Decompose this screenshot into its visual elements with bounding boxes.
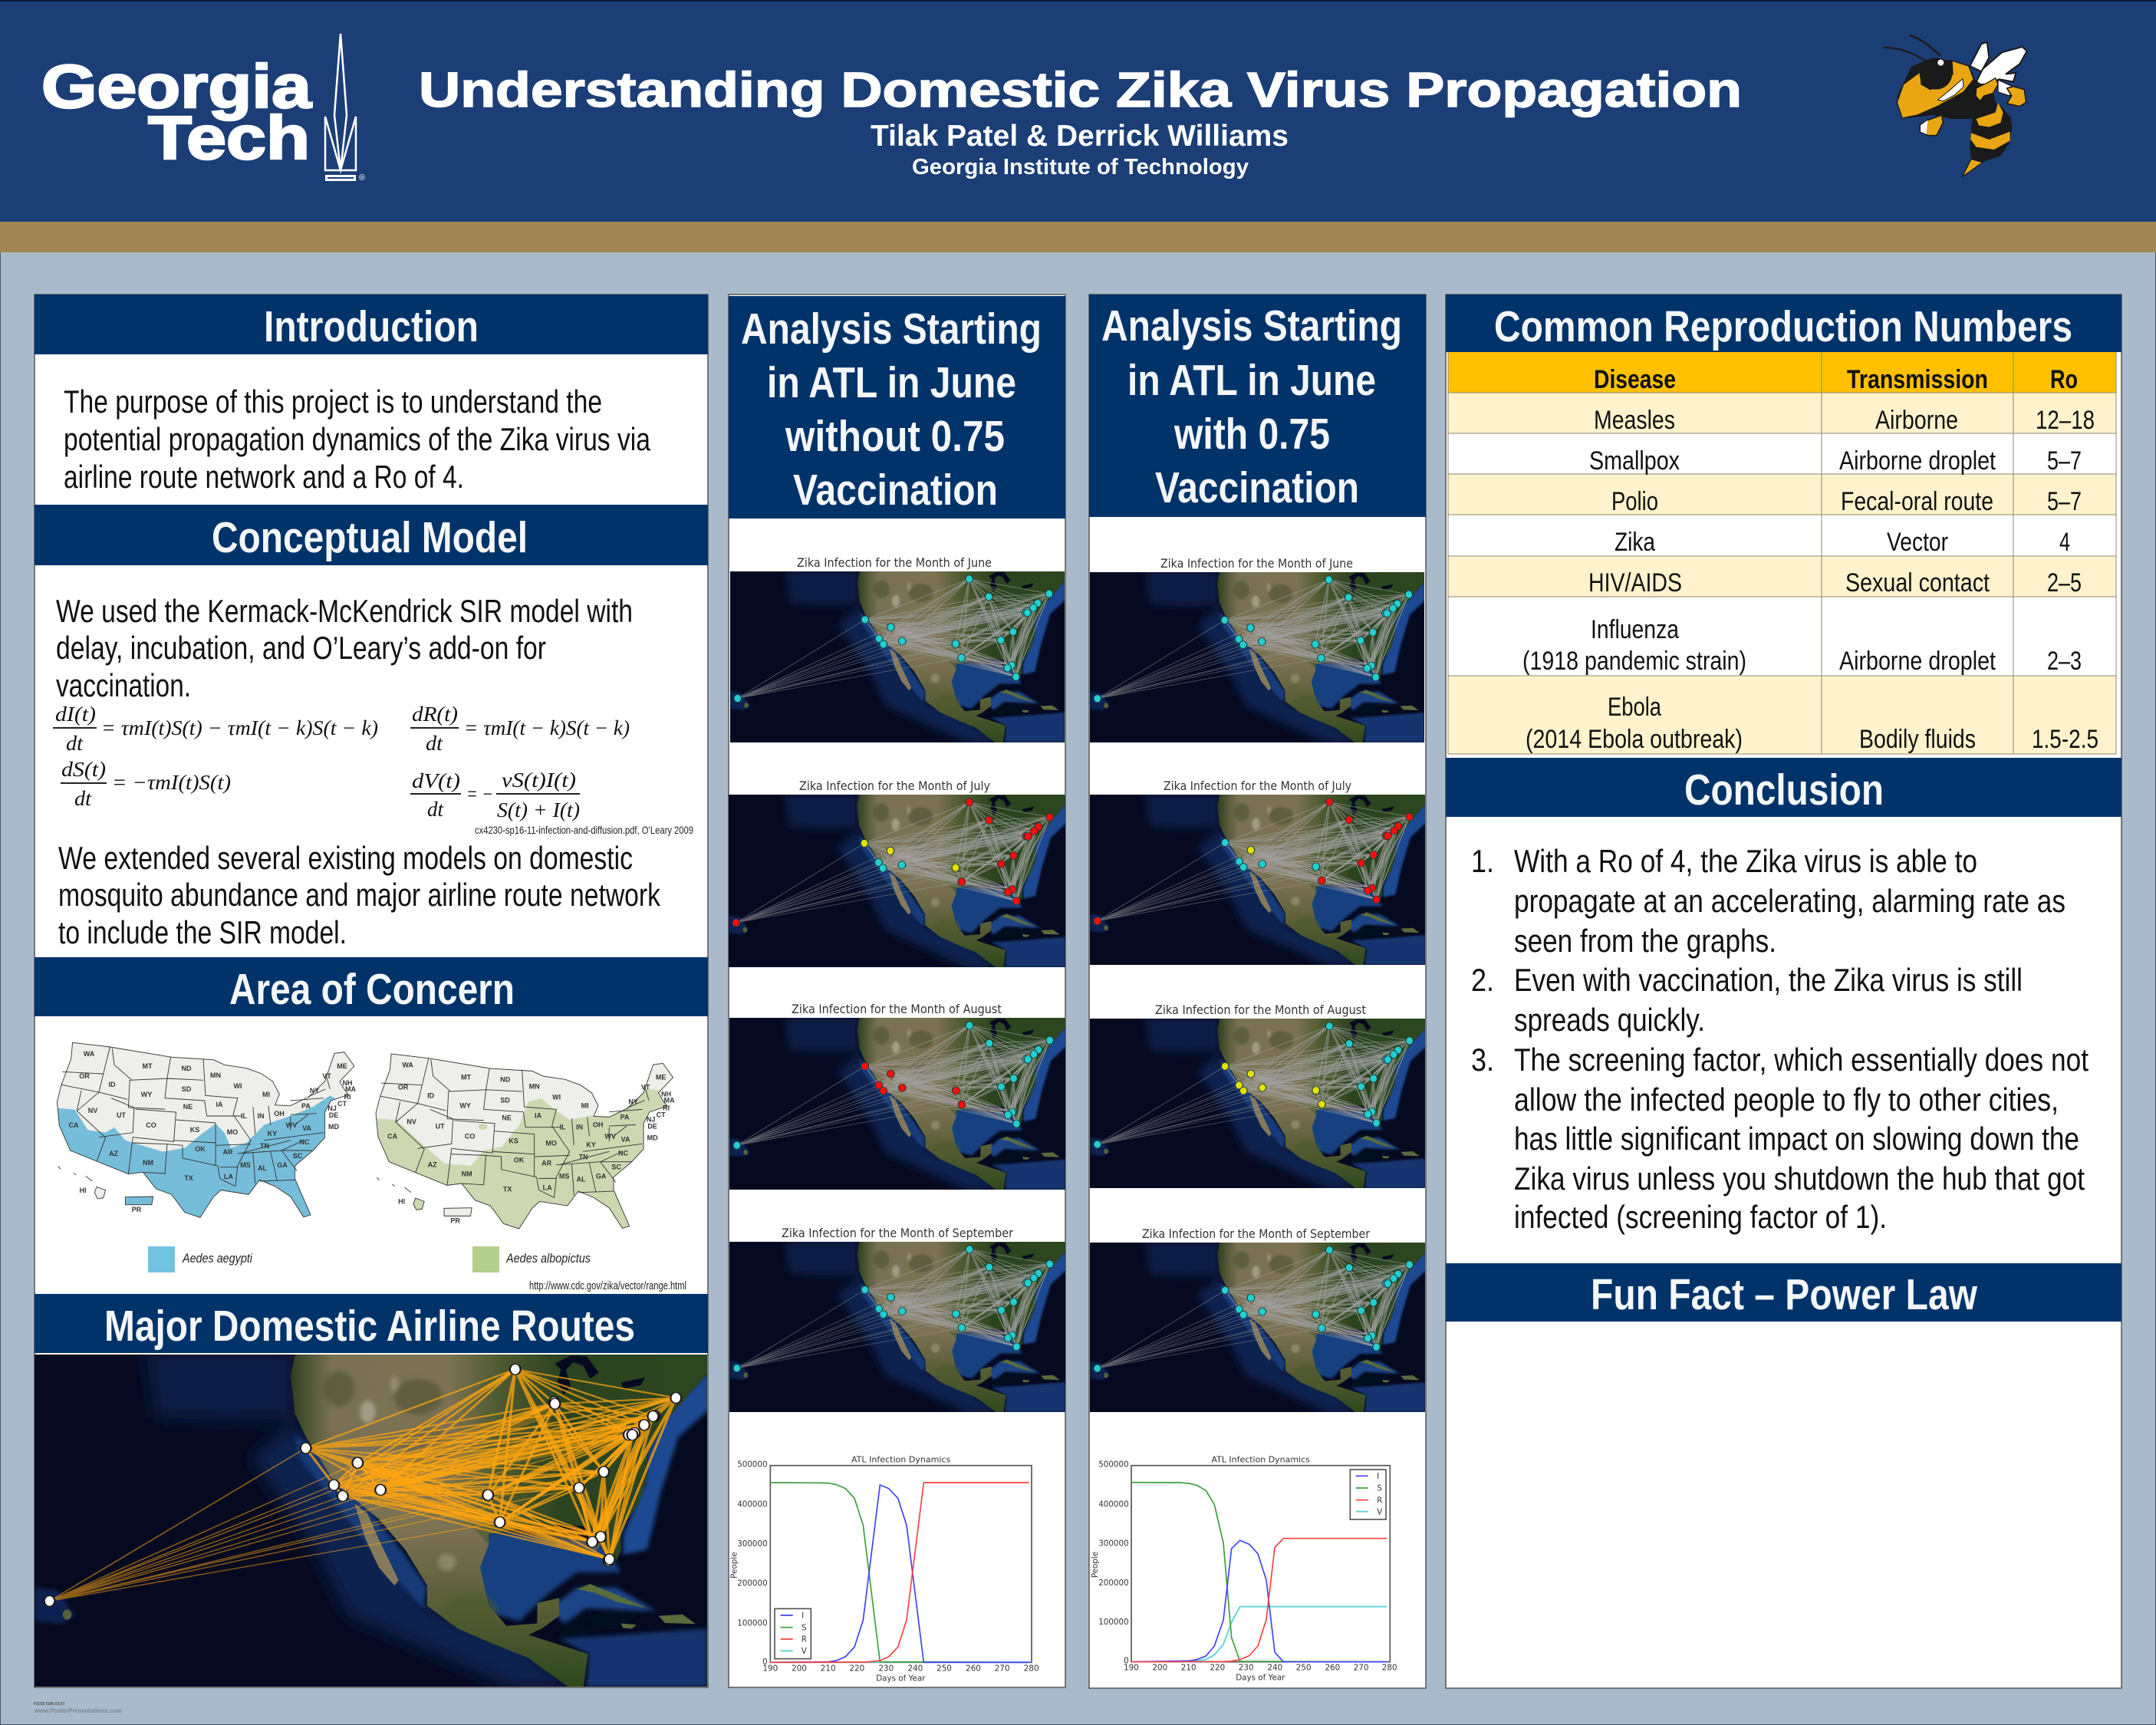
map: with vaccination, August bbox=[1090, 1002, 1426, 1190]
text block: introduction bbox=[64, 384, 651, 495]
chart: ATL dynamics without vaccination: 100000 bbox=[737, 1618, 768, 1628]
map: Aedes albopictus range: ND bbox=[500, 1076, 511, 1084]
map: Aedes aegypti range: NJ bbox=[328, 1104, 337, 1112]
map: Aedes aegypti range: AZ bbox=[109, 1150, 118, 1157]
chart: ATL dynamics with vaccination: 230 bbox=[1239, 1663, 1254, 1672]
table: reproduction numbers: 12–18 bbox=[2036, 406, 2095, 435]
map: Aedes albopictus range: HI bbox=[398, 1198, 405, 1206]
map: Aedes aegypti range: ME bbox=[337, 1062, 347, 1070]
map: Aedes aegypti range: WA bbox=[84, 1050, 95, 1058]
footer credit: POSTER TEMPLATE BY: bbox=[34, 1702, 65, 1707]
text block: model extension bbox=[58, 840, 661, 950]
map: no vaccination, September: Zika Infection for the Month of September bbox=[782, 1226, 1013, 1240]
panel: analysis with vaccination bbox=[1089, 295, 1426, 1688]
authors: Tilak Patel & Derrick Williams bbox=[871, 120, 1289, 153]
text block: model description bbox=[56, 593, 633, 703]
chart: ATL dynamics with vaccination: 200 bbox=[1152, 1663, 1167, 1672]
map: Aedes aegypti range: AR bbox=[222, 1148, 233, 1156]
map: Aedes aegypti range: NY bbox=[310, 1087, 319, 1095]
map: no vaccination, July: Zika Infection for the Month of July bbox=[799, 779, 990, 793]
map: Aedes albopictus range: NJ bbox=[647, 1116, 655, 1124]
footer credit bbox=[34, 1702, 122, 1714]
text block: conclusion list: seen from the graphs. bbox=[1514, 923, 1776, 959]
map: no vaccination, June: Zika Infection for the Month of June bbox=[797, 555, 992, 570]
map: Aedes albopictus range: VA bbox=[621, 1136, 630, 1144]
heading: analysis without vaccination: without 0.75 bbox=[785, 412, 1005, 461]
equations: dI(t) bbox=[55, 703, 96, 726]
map: Aedes albopictus range: DE bbox=[647, 1123, 657, 1131]
table: reproduction numbers: Bodily fluids bbox=[1859, 725, 1976, 754]
map: with vaccination, June: Zika Infection for the Month of June bbox=[1160, 556, 1353, 571]
map: with vaccination, July: Zika Infection for the Month of July bbox=[1164, 779, 1351, 793]
chart: ATL dynamics with vaccination: 250 bbox=[1296, 1663, 1312, 1672]
map: Aedes albopictus range: NH bbox=[661, 1091, 671, 1098]
chart: ATL dynamics with vaccination: 220 bbox=[1210, 1663, 1225, 1672]
chart: ATL dynamics with vaccination: People bbox=[1091, 1552, 1100, 1578]
map: Aedes aegypti range: MD bbox=[328, 1123, 339, 1131]
map: Aedes aegypti range: MO bbox=[227, 1128, 238, 1136]
table: reproduction numbers: Measles bbox=[1594, 406, 1675, 435]
text block: introduction: potential propagation dynamics of the Zika virus via bbox=[64, 421, 651, 457]
map: Aedes albopictus range: IL bbox=[560, 1124, 566, 1131]
map: Aedes albopictus range: KS bbox=[509, 1137, 518, 1145]
map: Aedes albopictus range: NV bbox=[407, 1118, 416, 1126]
text block: conclusion list: Even with vaccination, the Zika virus is still bbox=[1514, 962, 2023, 998]
map: Aedes aegypti range: CO bbox=[146, 1121, 156, 1129]
map: Aedes albopictus range: MA bbox=[664, 1097, 675, 1104]
map: Aedes albopictus range: OR bbox=[398, 1084, 409, 1091]
heading: Conceptual Model: Conceptual Model bbox=[212, 513, 528, 562]
header band bbox=[0, 0, 2156, 252]
equations: = −τmI(t)S(t) bbox=[112, 771, 231, 794]
logo: Georgia Tech: Georgia bbox=[41, 52, 312, 120]
map: Aedes albopictus range: MT bbox=[461, 1074, 472, 1081]
map: Aedes aegypti range: VT bbox=[322, 1072, 331, 1080]
table: reproduction numbers: Airborne droplet bbox=[1839, 446, 1996, 476]
map: airline routes bbox=[35, 1351, 709, 1690]
chart: ATL dynamics without vaccination: 400000 bbox=[737, 1500, 768, 1509]
equations: S(t) + I(t) bbox=[497, 798, 580, 821]
equations: vS(t)I(t) bbox=[502, 769, 576, 792]
map: no vaccination, August bbox=[729, 1002, 1066, 1191]
table: reproduction numbers: 2–3 bbox=[2047, 647, 2082, 676]
table: reproduction numbers: 4 bbox=[2059, 528, 2070, 557]
map: Aedes albopictus range: AZ bbox=[428, 1161, 437, 1169]
map: Aedes albopictus range: VT bbox=[641, 1084, 650, 1091]
chart: ATL dynamics with vaccination: 210 bbox=[1181, 1663, 1196, 1672]
heading: Area of Concern bbox=[35, 957, 708, 1016]
equations bbox=[53, 703, 630, 821]
chart: ATL dynamics with vaccination: Days of Year bbox=[1236, 1673, 1285, 1682]
map: Aedes aegypti range: NC bbox=[299, 1138, 310, 1146]
map: Aedes albopictus range: AL bbox=[577, 1176, 586, 1183]
heading: analysis with vaccination: with 0.75 bbox=[1173, 410, 1330, 459]
map: Aedes aegypti range: AL bbox=[258, 1164, 267, 1172]
map: with vaccination, September: Zika Infection for the Month of September bbox=[1142, 1226, 1370, 1241]
text block: conclusion list: allow the infected people to fly to other cities, bbox=[1514, 1081, 2059, 1118]
title: Understanding Domestic Zika Virus Propagation bbox=[419, 62, 1742, 117]
table: reproduction numbers: Airborne droplet bbox=[1839, 647, 1996, 676]
heading: Fun Fact: Fun Fact – Power Law bbox=[1591, 1270, 1978, 1319]
map: Aedes aegypti range: MS bbox=[240, 1161, 251, 1169]
map: Aedes aegypti range: TN bbox=[260, 1142, 269, 1150]
text block: introduction: The purpose of this project is to understand the bbox=[64, 384, 602, 420]
map: no vaccination, July bbox=[729, 779, 1066, 969]
table: reproduction numbers: Ebola bbox=[1608, 693, 1661, 722]
table: reproduction numbers: Fecal-oral route bbox=[1841, 487, 1993, 516]
map: Aedes albopictus range: ID bbox=[427, 1092, 435, 1100]
heading: analysis without vaccination: Vaccination bbox=[793, 466, 998, 515]
text block: model extension: mosquito abundance and major airline route network bbox=[58, 877, 661, 913]
chart: ATL dynamics without vaccination: 240 bbox=[907, 1664, 923, 1673]
chart: ATL dynamics without vaccination: 0 bbox=[762, 1658, 768, 1667]
text block: conclusion list: propagate at an accelerating, alarming rate as bbox=[1514, 883, 2065, 919]
map: Aedes albopictus range: MI bbox=[581, 1102, 589, 1110]
icon: yellow jacket mascot bbox=[1884, 35, 2027, 177]
table: reproduction numbers: HIV/AIDS bbox=[1588, 568, 1682, 597]
map: Aedes aegypti range: UT bbox=[117, 1111, 126, 1119]
heading: analysis with vaccination: Analysis Starting bbox=[1101, 301, 1402, 351]
chart: ATL dynamics without vaccination: 200000 bbox=[737, 1579, 768, 1588]
map: Aedes albopictus range: TX bbox=[503, 1186, 512, 1193]
map: Aedes aegypti range: SD bbox=[182, 1085, 192, 1093]
map: Aedes aegypti range: OK bbox=[195, 1145, 206, 1153]
equations: dR(t) bbox=[412, 703, 458, 726]
footer credit: www.PosterPresentations.com bbox=[34, 1707, 122, 1714]
map: Aedes albopictus range: GA bbox=[596, 1173, 607, 1180]
map: Aedes albopictus range: WY bbox=[459, 1102, 471, 1110]
map: Aedes albopictus range: NM bbox=[462, 1170, 472, 1178]
map: Aedes albopictus range: WI bbox=[552, 1094, 561, 1101]
map: Aedes albopictus range: WV bbox=[604, 1133, 616, 1141]
table: reproduction numbers: (2014 Ebola outbreak) bbox=[1526, 725, 1743, 754]
chart: ATL dynamics with vaccination: 0 bbox=[1124, 1657, 1129, 1666]
text block: conclusion list: 3. bbox=[1471, 1042, 1494, 1078]
table: reproduction numbers: Transmission bbox=[1847, 365, 1988, 394]
chart: ATL dynamics with vaccination: 500000 bbox=[1098, 1460, 1129, 1470]
equations: = − bbox=[466, 782, 493, 805]
heading: Conclusion: Conclusion bbox=[1684, 765, 1884, 815]
map: Aedes aegypti range: NV bbox=[88, 1107, 97, 1114]
map: Aedes aegypti range: IL bbox=[241, 1112, 248, 1120]
heading: analysis without vaccination: Analysis Starting bbox=[741, 305, 1042, 354]
chart: ATL dynamics without vaccination: 190 bbox=[762, 1664, 778, 1673]
map: Aedes aegypti range: KY bbox=[268, 1130, 277, 1137]
citation: equations source: cx4230-sp16-11-infection-and-diffusion.pdf, O’Leary 2009 bbox=[475, 824, 693, 836]
chart: ATL dynamics with vaccination: 200000 bbox=[1098, 1579, 1129, 1588]
map: Aedes aegypti range: GA bbox=[277, 1161, 288, 1169]
equations: = τmI(t − k)S(t − k) bbox=[464, 716, 630, 739]
chart: ATL dynamics with vaccination: 100000 bbox=[1098, 1618, 1129, 1627]
text block: conclusion list: infected (screening factor of 1). bbox=[1514, 1199, 1887, 1235]
map: Aedes aegypti range: KS bbox=[190, 1126, 199, 1134]
equations: dt bbox=[74, 787, 93, 810]
map: Aedes albopictus range: IA bbox=[535, 1112, 542, 1120]
heading: Introduction: Introduction bbox=[264, 302, 479, 351]
table: reproduction numbers: Vector bbox=[1887, 528, 1948, 557]
map: Aedes aegypti range: OH bbox=[274, 1110, 285, 1118]
map: Aedes albopictus range: MD bbox=[647, 1134, 658, 1142]
map: Aedes aegypti range: VA bbox=[302, 1124, 311, 1132]
table: reproduction numbers: 2–5 bbox=[2047, 568, 2082, 597]
map: Aedes albopictus range: CA bbox=[387, 1133, 398, 1141]
map: no vaccination, June bbox=[730, 555, 1065, 744]
map: with vaccination, September bbox=[1090, 1226, 1426, 1414]
chart: ATL dynamics with vaccination: S bbox=[1377, 1484, 1382, 1493]
heading: Fun Fact bbox=[1446, 1263, 2121, 1322]
equations: dt bbox=[426, 732, 444, 755]
table: reproduction numbers: Airborne bbox=[1875, 406, 1958, 435]
map: Aedes albopictus range: MN bbox=[529, 1083, 540, 1091]
chart: ATL dynamics without vaccination: V bbox=[802, 1647, 807, 1656]
chart: ATL dynamics without vaccination: 250 bbox=[936, 1664, 952, 1673]
table: reproduction numbers: Zika bbox=[1615, 528, 1655, 557]
map: Aedes albopictus range: CO bbox=[465, 1133, 475, 1141]
heading: analysis without vaccination: in ATL in June bbox=[767, 358, 1016, 407]
legend: Aedes albopictus bbox=[472, 1246, 591, 1272]
map: Aedes albopictus range: SC bbox=[611, 1164, 621, 1171]
text block: model description: We used the Kermack-McKendrick SIR model with bbox=[56, 593, 633, 629]
table: reproduction numbers: Smallpox bbox=[1589, 446, 1680, 476]
heading: analysis without vaccination bbox=[729, 296, 1065, 518]
map: Aedes albopictus range: NE bbox=[502, 1114, 512, 1122]
heading: analysis with vaccination: Vaccination bbox=[1155, 463, 1359, 512]
chart: ATL dynamics without vaccination: 200 bbox=[792, 1664, 807, 1673]
map: Aedes albopictus range: AR bbox=[541, 1160, 552, 1167]
logo: Georgia Tech bbox=[41, 34, 365, 183]
chart: ATL dynamics with vaccination: I bbox=[1377, 1472, 1379, 1481]
map: Aedes albopictus range: RI bbox=[663, 1104, 670, 1112]
map: Aedes albopictus range: SD bbox=[500, 1097, 510, 1104]
map: Aedes albopictus range: ME bbox=[656, 1074, 666, 1081]
chart: ATL dynamics with vaccination: 270 bbox=[1354, 1663, 1369, 1672]
map: Aedes albopictus range: MS bbox=[559, 1173, 569, 1180]
text block: conclusion list: 2. bbox=[1471, 962, 1494, 998]
heading: analysis with vaccination: in ATL in June bbox=[1127, 356, 1376, 405]
table: reproduction numbers: Polio bbox=[1611, 487, 1658, 516]
heading: Major Domestic Airline Routes: Major Domestic Airline Routes bbox=[104, 1302, 635, 1351]
chart: ATL dynamics with vaccination: ATL Infection Dynamics bbox=[1211, 1456, 1310, 1465]
chart: ATL dynamics without vaccination: 500000 bbox=[737, 1460, 768, 1470]
map: Aedes albopictus range: PA bbox=[620, 1114, 630, 1121]
map: Aedes aegypti range: WY bbox=[141, 1091, 152, 1098]
heading: Conceptual Model bbox=[35, 505, 708, 565]
table: reproduction numbers: (1918 pandemic strain) bbox=[1522, 647, 1746, 676]
map: Aedes aegypti range: PR bbox=[132, 1206, 142, 1213]
equations: dt bbox=[66, 732, 84, 755]
chart: ATL dynamics without vaccination: I bbox=[802, 1611, 804, 1621]
chart: ATL dynamics without vaccination: People bbox=[730, 1552, 739, 1579]
map: Aedes aegypti range: RI bbox=[344, 1093, 351, 1101]
table: reproduction numbers bbox=[1448, 352, 2116, 754]
text block: conclusion list: 1. bbox=[1471, 843, 1494, 879]
table: reproduction numbers: 1.5-2.5 bbox=[2032, 725, 2098, 754]
map: with vaccination, June bbox=[1090, 556, 1425, 744]
chart: ATL dynamics without vaccination: Days of Year bbox=[876, 1674, 926, 1683]
logo: Georgia Tech: ® bbox=[359, 173, 365, 183]
text block: model extension: We extended several existing models on domestic bbox=[58, 840, 633, 876]
chart: ATL dynamics with vaccination: 300000 bbox=[1098, 1539, 1129, 1549]
map: Aedes aegypti range: ID bbox=[109, 1081, 116, 1088]
map: Aedes aegypti range: OR bbox=[79, 1072, 90, 1080]
equations: dt bbox=[427, 798, 444, 821]
logo: Georgia Tech: Tech bbox=[148, 104, 310, 172]
heading: Area of Concern: Area of Concern bbox=[229, 965, 515, 1014]
text block: model extension: to include the SIR model. bbox=[58, 914, 347, 950]
legend: Aedes aegypti: Aedes aegypti bbox=[182, 1251, 253, 1266]
map: Aedes albopictus range: WA bbox=[402, 1062, 413, 1069]
map: Aedes aegypti range: DE bbox=[329, 1111, 338, 1119]
map: Aedes albopictus range: OH bbox=[593, 1121, 603, 1129]
map: Aedes albopictus range: KY bbox=[586, 1141, 596, 1149]
text block: conclusion list bbox=[1471, 843, 2089, 1235]
map: Aedes albopictus range bbox=[376, 1054, 675, 1230]
map: with vaccination, July bbox=[1090, 779, 1426, 966]
map: Aedes aegypti range: WV bbox=[286, 1121, 297, 1129]
chart: ATL dynamics with vaccination: 260 bbox=[1325, 1663, 1340, 1672]
map: Aedes albopictus range: CT bbox=[657, 1111, 666, 1119]
affiliation: Georgia Institute of Technology bbox=[912, 155, 1249, 179]
map: Aedes aegypti range: SC bbox=[293, 1152, 303, 1160]
equations: dV(t) bbox=[412, 769, 460, 792]
text block: model description: delay, incubation, and O’Leary’s add-on for bbox=[56, 630, 546, 666]
map: with vaccination, August: Zika Infection for the Month of August bbox=[1155, 1002, 1366, 1017]
panel: right column background bbox=[1446, 295, 2121, 1688]
heading: analysis with vaccination bbox=[1089, 295, 1426, 517]
text block: introduction: airline route network and a Ro of 4. bbox=[64, 459, 464, 495]
legend: Aedes albopictus: Aedes albopictus bbox=[505, 1251, 591, 1266]
chart: ATL dynamics with vaccination: 240 bbox=[1267, 1663, 1282, 1672]
chart: ATL dynamics with vaccination: 400000 bbox=[1098, 1500, 1129, 1509]
chart: ATL dynamics with vaccination: 190 bbox=[1124, 1663, 1139, 1672]
map: Aedes aegypti range: CA bbox=[69, 1121, 79, 1129]
map: no vaccination, September bbox=[729, 1226, 1066, 1414]
map: Aedes albopictus range: UT bbox=[436, 1123, 445, 1131]
map: Aedes aegypti range: WI bbox=[233, 1082, 242, 1090]
chart: ATL dynamics without vaccination: 270 bbox=[995, 1664, 1010, 1673]
panel: left column background bbox=[35, 295, 708, 1687]
heading: Introduction bbox=[35, 295, 708, 354]
text block: conclusion list: spreads quickly. bbox=[1514, 1002, 1705, 1038]
map: Aedes albopictus range: PR bbox=[450, 1217, 460, 1225]
heading: Conclusion bbox=[1446, 758, 2121, 817]
map: Aedes albopictus range: TN bbox=[579, 1154, 588, 1161]
map: Aedes aegypti range: MT bbox=[143, 1062, 153, 1070]
map: Aedes albopictus range: IN bbox=[576, 1124, 583, 1131]
chart: ATL dynamics without vaccination: 220 bbox=[849, 1664, 864, 1673]
legend: Aedes aegypti bbox=[148, 1246, 253, 1272]
chart: ATL dynamics without vaccination: 230 bbox=[878, 1664, 894, 1673]
map: Aedes aegypti range: NM bbox=[143, 1159, 153, 1167]
chart: ATL dynamics without vaccination: S bbox=[802, 1623, 807, 1632]
chart: ATL dynamics without vaccination: 260 bbox=[966, 1664, 981, 1673]
table: reproduction numbers: Sexual contact bbox=[1845, 568, 1990, 597]
table: reproduction numbers: Ro bbox=[2050, 365, 2078, 394]
panel: analysis without vaccination bbox=[729, 295, 1065, 1687]
table: reproduction numbers: 5–7 bbox=[2047, 487, 2082, 516]
map: Aedes albopictus range: OK bbox=[514, 1157, 525, 1164]
table: reproduction numbers: 5–7 bbox=[2047, 446, 2082, 476]
map: Aedes aegypti range: IN bbox=[258, 1112, 264, 1120]
table: reproduction numbers: Influenza bbox=[1591, 615, 1679, 644]
map: Aedes aegypti range: MA bbox=[345, 1085, 356, 1093]
map: Aedes aegypti range: ND bbox=[181, 1065, 192, 1072]
equations: = τmI(t)S(t) − τmI(t − k)S(t − k) bbox=[101, 716, 378, 739]
equations: dS(t) bbox=[61, 758, 106, 781]
chart: ATL dynamics with vaccination: R bbox=[1377, 1496, 1382, 1505]
map: Aedes aegypti range: HI bbox=[80, 1187, 86, 1194]
chart: ATL dynamics with vaccination: 280 bbox=[1382, 1663, 1397, 1672]
chart: ATL dynamics without vaccination: 210 bbox=[821, 1664, 836, 1673]
chart: ATL dynamics without vaccination: ATL Infection Dynamics bbox=[851, 1456, 950, 1465]
map: Aedes albopictus range: MO bbox=[545, 1140, 557, 1147]
text block: conclusion list: With a Ro of 4, the Zika virus is able to bbox=[1514, 843, 1977, 879]
map: Aedes aegypti range bbox=[57, 1042, 356, 1218]
map: no vaccination, August: Zika Infection for the Month of August bbox=[792, 1002, 1002, 1016]
map: Aedes aegypti range: MN bbox=[210, 1072, 221, 1079]
map: Aedes aegypti range: IA bbox=[216, 1101, 223, 1108]
chart: ATL dynamics without vaccination bbox=[730, 1456, 1039, 1683]
map: Aedes albopictus range: NC bbox=[618, 1150, 629, 1157]
map: Aedes aegypti range: CT bbox=[337, 1100, 347, 1108]
text block: model description: vaccination. bbox=[56, 667, 191, 703]
chart: ATL dynamics without vaccination: R bbox=[802, 1635, 807, 1644]
map: Aedes aegypti range: TX bbox=[184, 1174, 193, 1182]
chart: ATL dynamics without vaccination: 280 bbox=[1024, 1664, 1039, 1673]
chart: ATL dynamics without vaccination: 300000 bbox=[737, 1539, 768, 1549]
chart: ATL dynamics with vaccination bbox=[1091, 1456, 1397, 1682]
map: Aedes aegypti range: MI bbox=[262, 1091, 270, 1098]
map: Aedes albopictus range: NY bbox=[628, 1098, 638, 1106]
map: Aedes aegypti range: NE bbox=[183, 1103, 193, 1111]
map: Aedes albopictus range: LA bbox=[543, 1184, 552, 1192]
map: Aedes aegypti range: PA bbox=[301, 1102, 311, 1110]
citation: CDC range URL: http://www.cdc.gov/zika/vector/range.html bbox=[529, 1279, 686, 1292]
chart: ATL dynamics with vaccination: V bbox=[1377, 1507, 1382, 1516]
table: reproduction numbers: Disease bbox=[1594, 365, 1676, 394]
map: Aedes aegypti range: LA bbox=[224, 1173, 233, 1180]
map: Aedes aegypti range: NH bbox=[342, 1079, 353, 1087]
